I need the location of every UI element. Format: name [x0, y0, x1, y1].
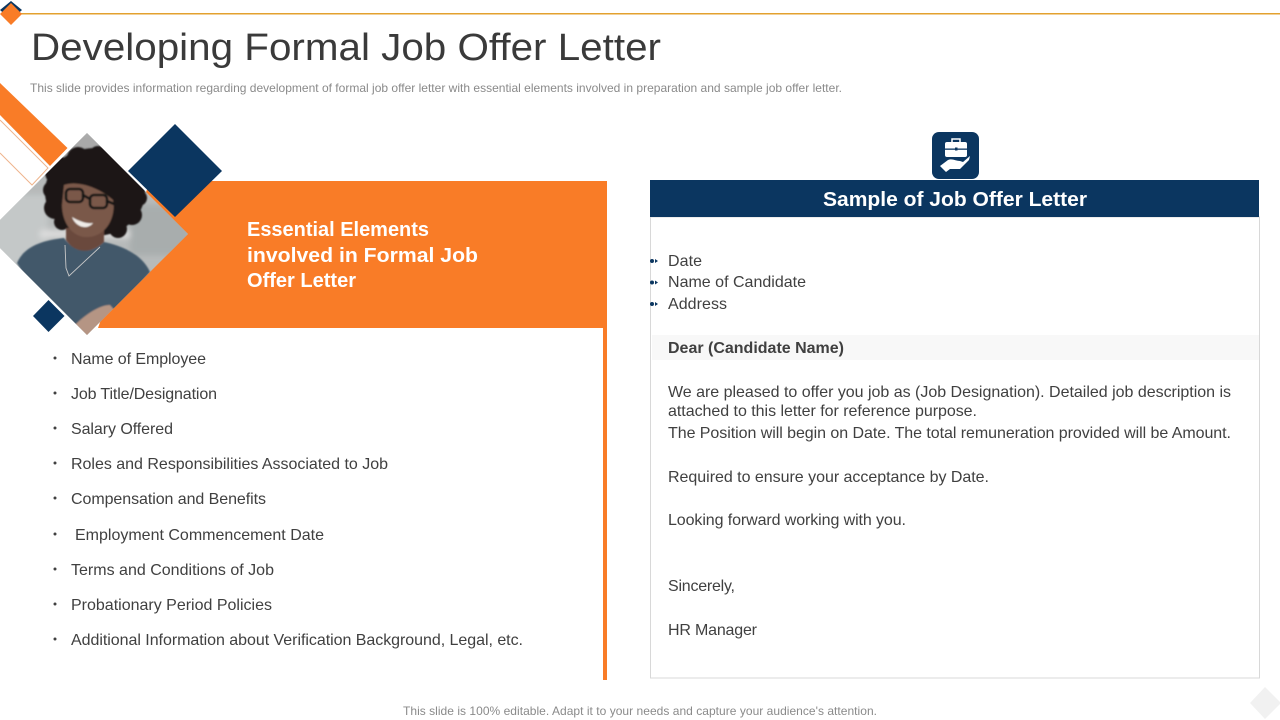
address block with arrow bullets: Address: [668, 296, 727, 313]
small navy diamond: [33, 300, 64, 332]
signature: [668, 578, 758, 639]
bullet list: essential elements: Additional Information about Verification Background, Legal, etc.: [71, 632, 523, 649]
letter body: The Position will begin on Date. The total remuneration provided will be Amount.: [668, 425, 1231, 442]
decorative stripes top-left: [0, 83, 68, 185]
bullet list: essential elements: Probationary Period Policies: [71, 597, 272, 614]
heading: essential elements: [247, 219, 478, 292]
bullet list: essential elements: [54, 351, 523, 649]
photo: smiling woman in diamond frame: [0, 133, 190, 340]
address block with arrow bullets: Name of Candidate: [668, 274, 806, 291]
glasses: [66, 189, 114, 208]
letter body: Looking forward working with you.: [668, 512, 906, 529]
bullet list: essential elements: Salary Offered: [71, 421, 173, 438]
header bar: sample of job offer letter: Sample of Job Offer Letter: [823, 189, 1087, 211]
hair: [43, 146, 147, 238]
signature: HR Manager: [668, 622, 758, 639]
bullet list: essential elements: Roles and Responsibilities Associated to Job: [71, 456, 388, 473]
shirt: [17, 238, 150, 335]
panel: essential elements header: [98, 181, 607, 328]
bullet list: essential elements: Job Title/Designation: [71, 386, 217, 403]
faint corner diamond: [1250, 687, 1280, 719]
header bar: sample of job offer letter: [650, 180, 1259, 217]
salutation band: Dear (Candidate Name): [668, 340, 844, 357]
large navy diamond: [128, 124, 222, 217]
neck: [66, 228, 104, 251]
necklace: [65, 245, 100, 276]
bullet list: essential elements: Compensation and Benefits: [71, 491, 266, 508]
orange vertical divider: [603, 328, 607, 680]
address block with arrow bullets: Date: [668, 253, 702, 270]
title: Developing Formal Job Offer Letter: [31, 27, 661, 69]
face: [62, 183, 114, 237]
heading: essential elements: Essential Elements: [247, 219, 429, 241]
arm: [75, 304, 114, 335]
address block with arrow bullets: [650, 253, 806, 313]
letter body: [668, 384, 1231, 529]
salutation band: [652, 335, 1259, 360]
bullet list: essential elements: Terms and Conditions of Job: [71, 562, 274, 579]
top rule with corner diamonds: [0, 1, 1280, 25]
heading: essential elements: Offer Letter: [247, 270, 356, 292]
letter body: Required to ensure your acceptance by Date.: [668, 469, 989, 486]
icon: hand holding briefcase: [932, 132, 979, 179]
heading: essential elements: involved in Formal Job: [247, 245, 478, 267]
smile: [72, 217, 93, 227]
bullet list: essential elements: Employment Commencement Date: [75, 527, 324, 544]
letter body: attached to this letter for reference purpose.: [668, 403, 977, 420]
bullet list: essential elements: Name of Employee: [71, 351, 206, 368]
panel: sample letter: [650, 180, 1260, 678]
subtitle: This slide provides information regarding development of formal job offer letter with essential elements involved in preparation and sample job offer letter.: [30, 81, 842, 95]
letter body: We are pleased to offer you job as (Job Designation). Detailed job description is: [668, 384, 1231, 401]
footer note: This slide is 100% editable. Adapt it to your needs and capture your audience's attention.: [403, 704, 877, 718]
signature: Sincerely,: [668, 578, 735, 595]
